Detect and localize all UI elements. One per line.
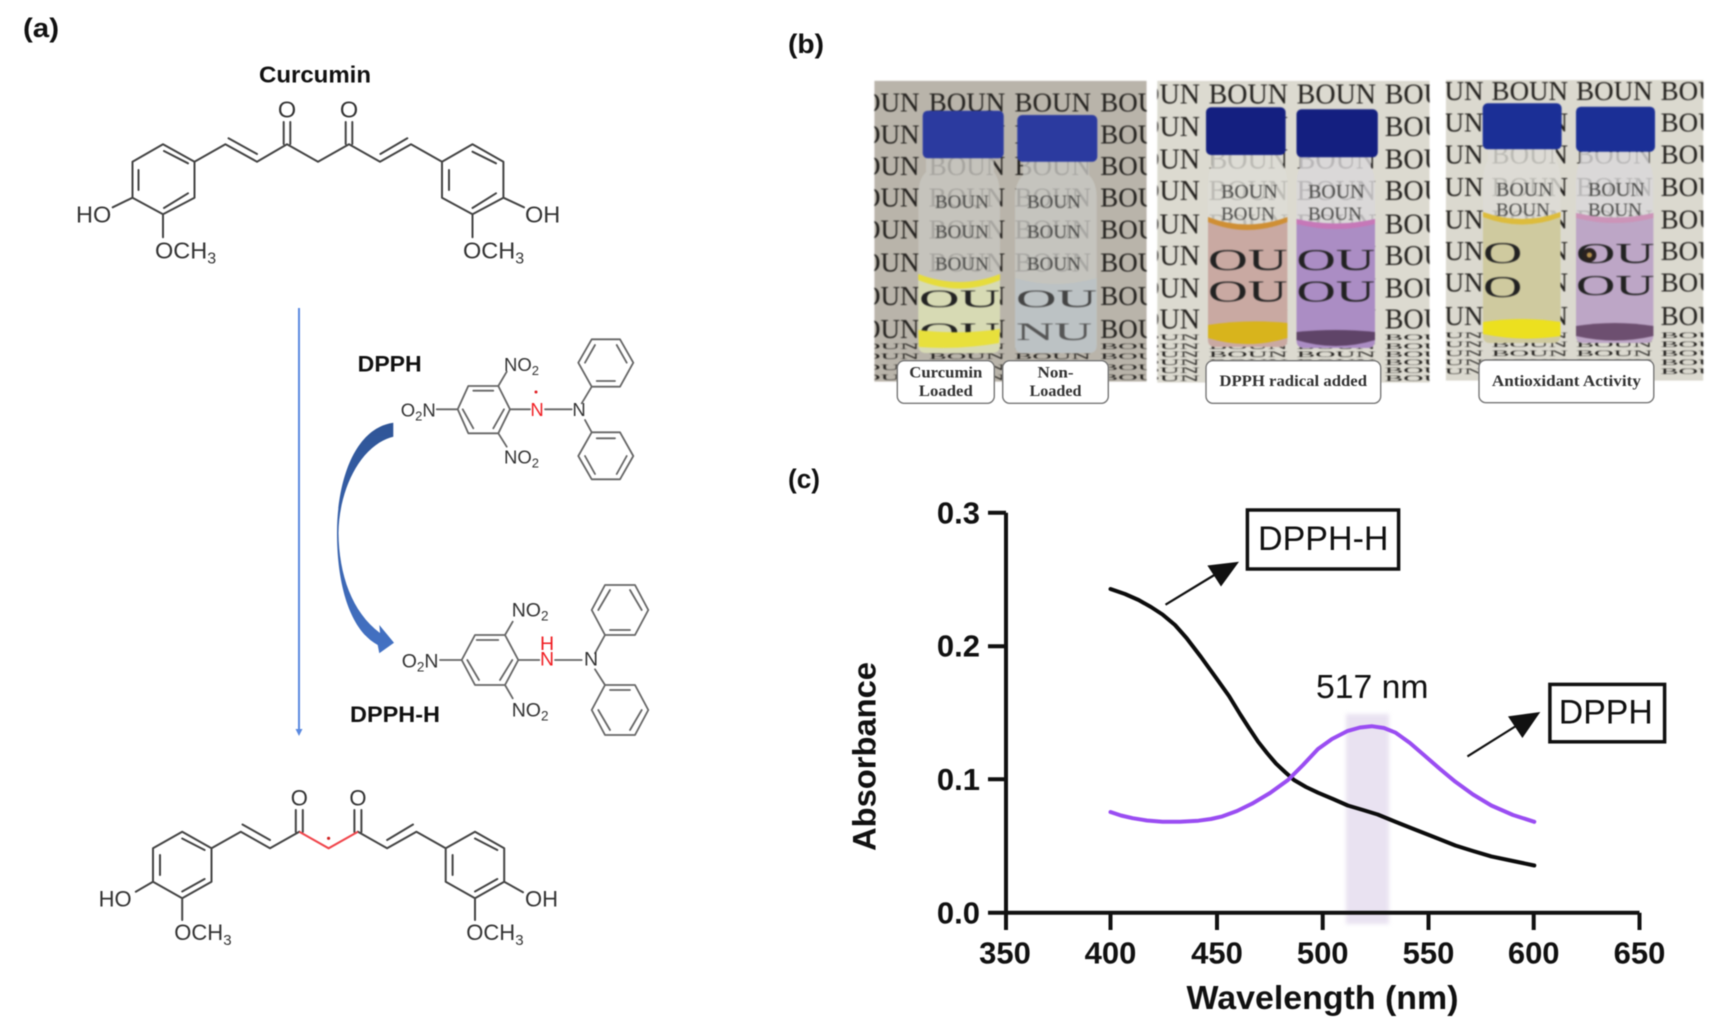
- photo: curcumin loaded and non-loaded vials: BOUN BOUN BOUN BOUN: [843, 214, 1177, 244]
- curve: DPPH-H (black): [1110, 589, 1534, 866]
- molecule: DPPH-H: H: [540, 633, 554, 655]
- vial 2: BOUN: [1308, 181, 1365, 203]
- vial 1: BOUN: [1496, 200, 1550, 221]
- molecule: DPPH-H: N: [540, 649, 554, 671]
- vial 2: [1296, 109, 1378, 348]
- photo: DPPH radical added vials: BOUN BOUN BOUN BOUN: [1121, 144, 1464, 175]
- y-axis tick labels: [937, 496, 980, 931]
- arrow: to DPPH box: [1467, 712, 1540, 756]
- molecule: curcumin radical: OCH: [174, 920, 223, 945]
- photo: DPPH radical added vials: BOUN BOUN BOUN BOUN: [1121, 209, 1464, 240]
- vial 1: BOUN: [935, 222, 989, 243]
- molecule: DPPH radical: NO: [504, 446, 532, 467]
- vial 2: BOUN: [1588, 200, 1642, 221]
- tag: Non-Loaded: Non-: [1038, 364, 1074, 381]
- molecule: DPPH-H: 2: [541, 609, 548, 624]
- photo: DPPH radical added vials: BOUN BOUN BOUN BOUN: [1121, 374, 1464, 383]
- molecule: curcumin: OCH: [463, 237, 515, 263]
- panel (b): vial photographs: [788, 29, 1717, 403]
- photo: DPPH radical added vials: BOUN BOUN BOUN BOUN: [1121, 273, 1464, 304]
- molecule: DPPH radical: N: [572, 399, 586, 420]
- photo: DPPH radical added vials: BOUN BOUN BOUN BOUN: [1121, 304, 1464, 335]
- molecule: curcumin radical: O: [349, 786, 366, 811]
- x-axis tick labels: 600: [1508, 936, 1560, 971]
- molecule: DPPH radical: NO: [504, 354, 532, 375]
- molecule: DPPH radical: 2: [415, 408, 422, 424]
- vial 2: OU: [1296, 243, 1375, 277]
- vial 1: BOUN: [1221, 181, 1278, 203]
- vial 1: [1483, 103, 1562, 343]
- photo: DPPH radical added vials: BOUN BOUN BOUN BOUN: [1121, 333, 1464, 342]
- molecule: DPPH radical: 2: [532, 455, 539, 470]
- band: 517 nm highlight: [1346, 714, 1389, 924]
- x-axis tick labels: 650: [1614, 936, 1665, 971]
- molecule: curcumin radical: 3: [223, 932, 232, 949]
- molecule: DPPH-H: NO: [512, 700, 541, 722]
- molecule: DPPH radical: O: [401, 400, 415, 420]
- photo: curcumin loaded and non-loaded vials: BOUN BOUN BOUN BOUN: [843, 314, 1177, 344]
- vial 2: BOUN: [1308, 204, 1362, 225]
- molecule: DPPH radical: N: [530, 399, 544, 420]
- vial 2: [1015, 115, 1097, 353]
- molecule: DPPH-H: N: [584, 649, 598, 671]
- photo: DPPH radical added vials: BOUN BOUN BOUN BOUN: [1121, 358, 1464, 367]
- photo: curcumin loaded and non-loaded vials: BOUN BOUN BOUN BOUN: [843, 88, 1177, 118]
- molecule: DPPH-H: [402, 585, 648, 735]
- tag: Antioxidant Activity: [1479, 360, 1654, 403]
- y-axis tick labels: 0.3: [937, 496, 980, 531]
- vial 1: [918, 111, 1004, 353]
- panel label (c): (c): [788, 464, 820, 494]
- panel (c): absorbance spectrum chart: [788, 464, 1665, 1016]
- annotation: 517 nm: 517 nm: [1316, 668, 1428, 705]
- molecule: DPPH radical: N: [422, 400, 436, 420]
- label: DPPH-H: DPPH-H: [350, 702, 440, 727]
- tag: Curcumin Loaded: Loaded: [919, 383, 973, 400]
- vial 2: [1576, 107, 1655, 343]
- molecule: curcumin: [76, 96, 560, 267]
- vial 1: BOUN: [935, 254, 989, 275]
- callout box: DPPH: [1550, 684, 1665, 742]
- molecule: DPPH-H: N: [424, 650, 438, 672]
- tag: Curcumin Loaded: Curcumin: [909, 364, 982, 381]
- photo: DPPH radical added vials: BOUN BOUN BOUN BOUN: [1121, 112, 1464, 143]
- photo: DPPH radical added vials: BOUN BOUN BOUN BOUN: [1121, 79, 1464, 110]
- molecule: curcumin radical: OH: [525, 887, 558, 912]
- molecule: curcumin: 3: [207, 250, 216, 267]
- tag: Non-Loaded: Loaded: [1030, 383, 1082, 400]
- photo: antioxidant activity vials: [1444, 80, 1704, 382]
- photo: DPPH radical added vials: BOUN BOUN BOUN BOUN: [1121, 342, 1464, 351]
- molecule: curcumin radical: 3: [515, 932, 524, 949]
- molecule: curcumin: O: [340, 96, 358, 122]
- photo: DPPH radical added vials: BOUN BOUN BOUN BOUN: [1121, 176, 1464, 207]
- molecule: curcumin radical: O: [291, 786, 308, 811]
- x-axis title: Wavelength (nm): [1186, 979, 1458, 1016]
- molecule: DPPH radical: 2: [532, 363, 539, 378]
- x-axis tick labels: 500: [1297, 936, 1349, 971]
- photo: curcumin loaded and non-loaded vials: BOUN BOUN BOUN BOUN: [843, 352, 1177, 361]
- molecule: DPPH-H: NO: [512, 600, 541, 622]
- molecule: curcumin radical: [99, 786, 558, 949]
- heading: Curcumin: Curcumin: [259, 62, 371, 88]
- arrow: long blue reaction arrow: [296, 308, 302, 736]
- tag: Curcumin Loaded: [897, 361, 994, 403]
- molecule: DPPH-H: O: [402, 650, 417, 672]
- vial 2: OU: [1576, 238, 1655, 270]
- tag: Non-Loaded: [1003, 361, 1108, 403]
- vial 2: OU: [1296, 275, 1375, 309]
- vial 1: BOUN: [1496, 179, 1553, 201]
- molecule: DPPH-H: 2: [417, 659, 424, 674]
- photo: curcumin loaded and non-loaded vials: BOUN BOUN BOUN BOUN: [843, 248, 1177, 278]
- vial 2: NU: [1016, 317, 1092, 346]
- vial 1: O: [1483, 236, 1522, 270]
- vial 1: [1206, 107, 1288, 347]
- photo: curcumin loaded and non-loaded vials: BOUN BOUN BOUN BOUN: [843, 373, 1177, 382]
- vial 1: OU: [1208, 274, 1288, 309]
- photo: curcumin loaded and non-loaded vials: BOUN BOUN BOUN BOUN: [843, 119, 1177, 149]
- y-axis tick labels: 0.1: [937, 762, 980, 797]
- label: DPPH: DPPH: [358, 352, 422, 377]
- tag: DPPH radical added: [1206, 361, 1381, 403]
- molecule: curcumin: O: [278, 96, 296, 122]
- photo: curcumin loaded and non-loaded vials: BOUN BOUN BOUN BOUN: [843, 363, 1177, 372]
- curve: DPPH (purple): [1110, 726, 1534, 822]
- vial 2: OU: [1576, 270, 1655, 302]
- photo: DPPH radical added vials: BOUN BOUN BOUN BOUN: [1121, 366, 1464, 375]
- molecule: curcumin: HO: [76, 202, 111, 228]
- x-axis tick labels: 550: [1403, 936, 1454, 971]
- y-axis tick labels: 0.2: [937, 628, 980, 663]
- photo: DPPH radical added vials: BOUN BOUN BOUN BOUN: [1121, 350, 1464, 359]
- photo: curcumin loaded and non-loaded vials: BOUN BOUN BOUN BOUN: [843, 151, 1177, 181]
- vial 2: BOUN: [1027, 192, 1081, 213]
- photo: curcumin loaded and non-loaded vials: [873, 80, 1148, 382]
- molecule: DPPH-H: 2: [541, 709, 548, 724]
- arrow: curved blue arrow from DPPH to DPPH-H: [337, 423, 394, 653]
- molecule: curcumin: 3: [515, 250, 524, 267]
- vial 2: OU: [1016, 285, 1097, 313]
- photo: DPPH radical added vials: [1156, 80, 1431, 384]
- x-axis tick labels: [979, 936, 1665, 971]
- photo: curcumin loaded and non-loaded vials: BOUN BOUN BOUN BOUN: [843, 281, 1177, 311]
- callout box: DPPH-H: [1247, 510, 1399, 569]
- molecule: curcumin radical: OCH: [466, 920, 515, 945]
- x-axis tick labels: 400: [1085, 936, 1136, 971]
- molecule: curcumin radical: HO: [99, 887, 132, 912]
- vial 1: OU: [919, 318, 1000, 346]
- molecule: curcumin: OH: [525, 202, 560, 228]
- x-axis tick labels: 350: [979, 936, 1031, 971]
- y-axis title: Absorbance: [847, 662, 883, 851]
- vial 2: BOUN: [1027, 222, 1081, 243]
- tag: Antioxidant Activity: Antioxidant Activity: [1492, 373, 1641, 390]
- axes and tick marks: [988, 513, 1640, 930]
- panel label (b): (b): [788, 29, 824, 59]
- arrow: to DPPH-H box: [1166, 562, 1239, 605]
- vial 1: O: [1483, 270, 1522, 304]
- vial 2: BOUN: [1027, 254, 1081, 275]
- panel (a): reaction scheme: [23, 13, 648, 949]
- photo: curcumin loaded and non-loaded vials: BOUN BOUN BOUN BOUN: [843, 342, 1177, 351]
- vial 2: BOUN: [1588, 179, 1645, 201]
- x-axis tick labels: 450: [1191, 936, 1243, 971]
- vial 1: OU: [919, 285, 1000, 313]
- callout box: DPPH-H: DPPH-H: [1258, 520, 1388, 558]
- vial 1: BOUN: [1221, 204, 1275, 225]
- molecule: curcumin: OCH: [155, 237, 207, 263]
- photo: DPPH radical added vials: BOUN BOUN BOUN BOUN: [1121, 241, 1464, 272]
- vial 1: BOUN: [935, 192, 989, 213]
- y-axis tick labels: 0.0: [937, 896, 980, 931]
- photo: curcumin loaded and non-loaded vials: BOUN BOUN BOUN BOUN: [843, 183, 1177, 213]
- tag: DPPH radical added: DPPH radical added: [1219, 373, 1367, 390]
- molecule: DPPH radical: [401, 339, 633, 479]
- panel label (a): (a): [23, 13, 59, 43]
- callout box: DPPH: DPPH: [1559, 694, 1653, 732]
- vial 1: OU: [1208, 243, 1288, 277]
